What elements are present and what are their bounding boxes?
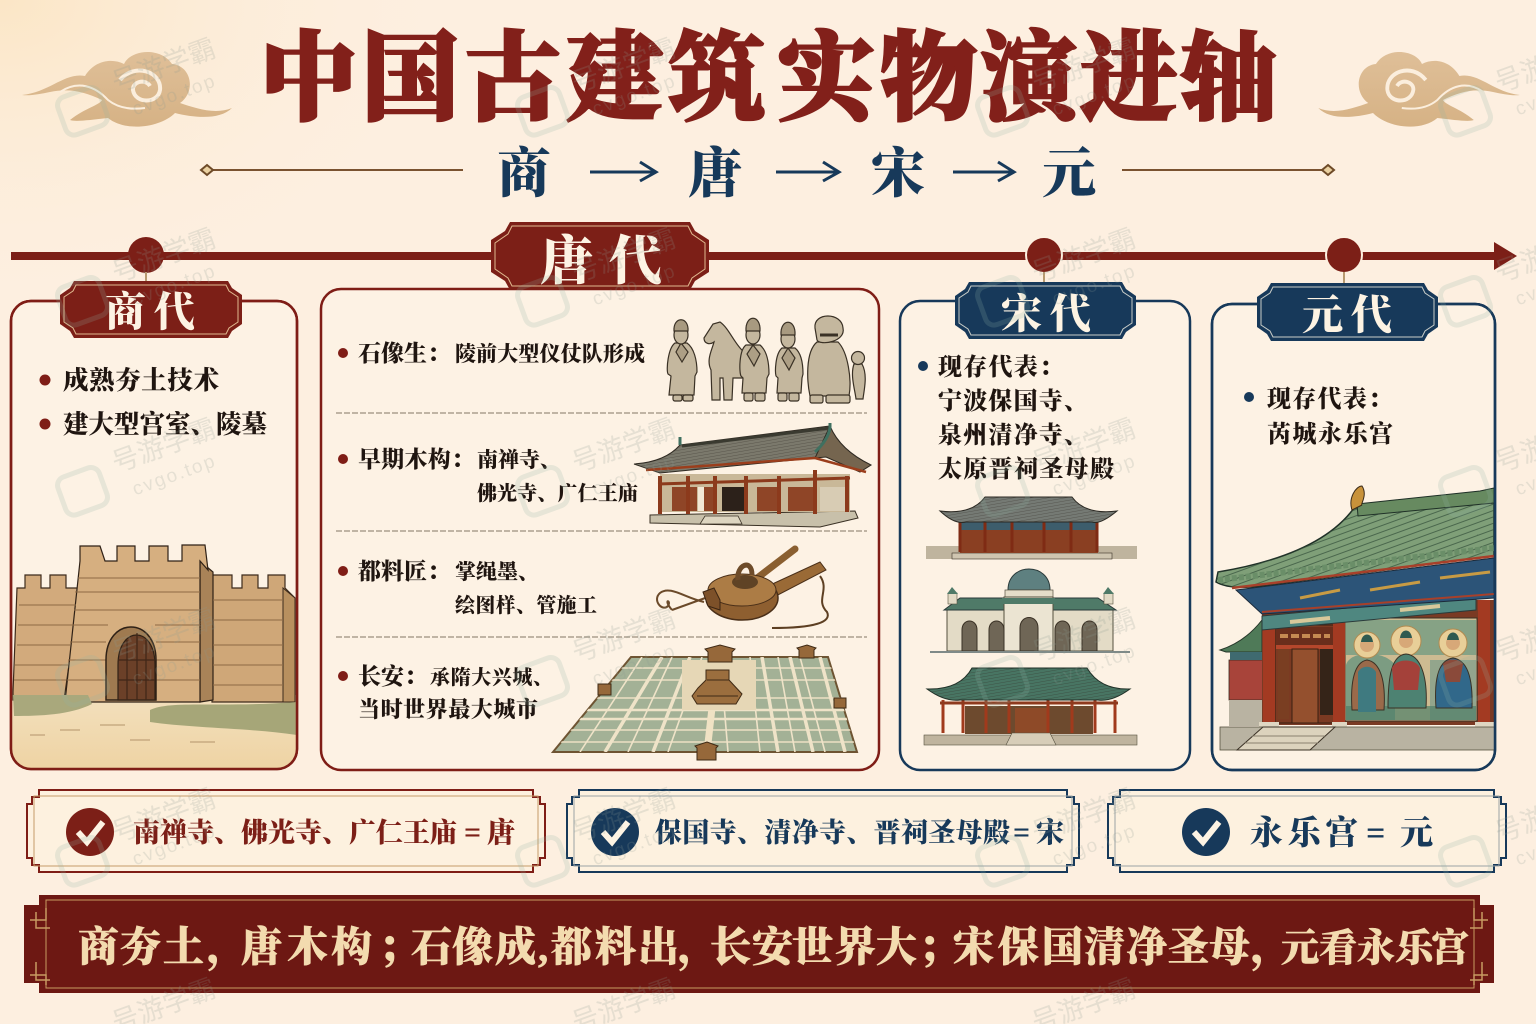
text: 宋代 list: 宁波保国寺、	[938, 387, 1088, 415]
text: 都料匠: 掌绳墨、	[455, 560, 539, 584]
watermark: cvgo.top	[130, 70, 219, 120]
text: 早期木构: 早期木构：	[358, 447, 474, 472]
badge: 唐代	[491, 222, 709, 291]
callout: 宋 summary: 宋	[1036, 816, 1064, 849]
watermark: cvgo.top	[1050, 820, 1139, 870]
text: 石像生: 陵前大型仪仗队形成	[455, 342, 645, 366]
text: 早期木构	[338, 447, 638, 505]
banner: mnemonic	[24, 895, 1494, 993]
badge: 元代: 元代	[1302, 292, 1393, 338]
text: 元代 list: 芮城永乐宫	[1267, 420, 1393, 448]
watermark: cvgo.top	[130, 640, 219, 690]
watermark: 号游学霸	[108, 33, 220, 98]
illustration: 清净寺	[930, 569, 1130, 653]
illustration: Chang'an city plan	[550, 645, 860, 760]
illustration: Yongle Palace hall	[1216, 486, 1496, 750]
illustration: rammed earth city wall	[11, 545, 297, 770]
watermark: 号游学霸	[108, 223, 220, 288]
badge: 宋代: 宋代	[1001, 291, 1092, 337]
subtitle: dynasty sequence: 唐	[688, 143, 742, 204]
title: 中国古建筑实物演进轴	[260, 26, 1277, 133]
text: 商代 bullets: 成熟夯土技术	[63, 366, 219, 395]
watermark: cvgo.top	[590, 820, 679, 870]
callout: 唐 summary: =	[464, 816, 481, 849]
badge: 宋代	[955, 282, 1136, 339]
watermark: 号游学霸	[568, 603, 680, 668]
text: 商代 bullets: 建大型宫室、陵墓	[63, 410, 267, 439]
watermark: cvgo.top	[130, 260, 219, 310]
callout: 元 summary: 元	[1400, 815, 1433, 852]
callout: 元 summary	[1108, 790, 1506, 872]
callout: 唐 summary: 南禅寺、佛光寺、广仁王庙	[133, 817, 457, 848]
watermark: 号游学霸	[108, 413, 220, 478]
text: 宋代 list: 泉州清净寺、	[938, 421, 1088, 449]
watermark: cvgo.top	[1050, 640, 1139, 690]
subtitle: dynasty sequence	[201, 143, 1334, 204]
watermark: 号游学霸	[568, 413, 680, 478]
panel: 商代	[11, 301, 297, 770]
icon: left cloud	[22, 52, 232, 127]
text: 石像生: 石像生：	[358, 341, 450, 366]
callout: 宋 summary	[567, 790, 1079, 872]
watermark: 号游学霸	[1028, 223, 1140, 288]
watermark: 号游学霸	[1028, 33, 1140, 98]
text: 元代 list: 现存代表：	[1267, 385, 1392, 413]
watermark: 号游学霸	[568, 33, 680, 98]
watermark: 号游学霸	[1028, 783, 1140, 848]
watermark: 号游学霸	[108, 603, 220, 668]
text: 早期木构: 佛光寺、广仁王庙	[477, 481, 638, 505]
text: 长安: 当时世界最大城市	[358, 697, 538, 722]
callout: 宋 summary: 保国寺、清净寺、晋祠圣母殿	[655, 817, 1010, 848]
timeline	[11, 237, 1517, 284]
text: 都料匠: 绘图样、管施工	[455, 593, 597, 617]
text: 都料匠	[338, 559, 597, 617]
text: 宋代 list	[918, 353, 1114, 483]
illustration: 保国寺	[926, 497, 1137, 559]
illustration: Tang wooden hall	[634, 423, 871, 527]
text: 宋代 list: 现存代表：	[938, 353, 1063, 381]
watermark: 号游学霸	[568, 223, 680, 288]
badge: 商代: 商代	[105, 289, 196, 335]
callout: 宋 summary: =	[1013, 816, 1030, 849]
watermark: cvgo.top	[590, 70, 679, 120]
watermark: cvgo.top	[1050, 450, 1139, 500]
badge: 元代	[1257, 283, 1438, 341]
text: 长安: 承隋大兴城、	[430, 665, 553, 689]
panel: 唐代	[321, 289, 879, 770]
watermark: 号游学霸	[568, 783, 680, 848]
text: 元代 list	[1244, 385, 1393, 448]
badge: 商代	[60, 281, 242, 338]
text: 宋代 list: 太原晋祠圣母殿	[938, 456, 1114, 483]
watermark: cvgo.top	[590, 260, 679, 310]
panel: 宋代	[900, 301, 1190, 770]
watermark: 号游学霸	[108, 783, 220, 848]
icon: right cloud	[1318, 52, 1520, 127]
watermark: 号游学霸	[1028, 413, 1140, 478]
badge: 唐代: 唐代	[540, 231, 663, 291]
mural figures	[1352, 626, 1472, 712]
text: 长安: 长安：	[358, 663, 427, 689]
callout: 元 summary: =	[1366, 815, 1385, 852]
subtitle: dynasty sequence: 元	[1042, 144, 1096, 204]
subtitle: dynasty sequence: 商	[497, 144, 551, 204]
banner: mnemonic: 元看永乐宫	[1281, 927, 1469, 970]
callout: 唐 summary: 唐	[487, 816, 515, 849]
callout: 唐 summary	[27, 790, 545, 872]
panel: 元代	[1212, 304, 1496, 770]
illustration: stone statues	[667, 316, 865, 403]
watermark: cvgo.top	[1050, 70, 1139, 120]
subtitle: dynasty sequence: 宋	[871, 144, 925, 204]
text: 石像生	[338, 341, 645, 366]
watermark: cvgo.top	[590, 640, 679, 690]
text: 都料匠: 都料匠：	[358, 559, 450, 584]
text: 早期木构: 南禅寺、	[477, 448, 561, 472]
callout: 元 summary: 永乐宫	[1250, 814, 1358, 852]
text: 长安	[338, 663, 553, 722]
watermark: cvgo.top	[1050, 260, 1139, 310]
watermark: cvgo.top	[130, 450, 219, 500]
banner: mnemonic: 商夯土，唐木构；石像成,都料出，长安世界大；宋保国清净圣母，	[78, 924, 1292, 972]
text: 商代 bullets	[40, 366, 267, 439]
watermark: cvgo.top	[590, 450, 679, 500]
watermark: cvgo.top	[130, 820, 219, 870]
illustration: 圣母殿	[924, 668, 1137, 745]
illustration: carpenter ink marker	[657, 549, 828, 628]
watermark: 号游学霸	[1028, 603, 1140, 668]
